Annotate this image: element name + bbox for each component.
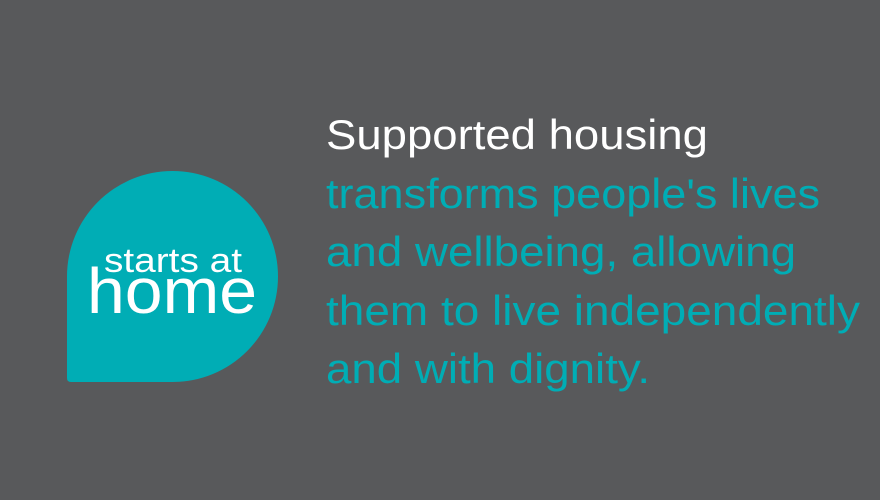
statement text block [326, 111, 860, 392]
statement heading line: Supported housing [326, 111, 708, 158]
logo speech-drop shape [67, 171, 278, 382]
statement teal lines: transforms people's lives [326, 170, 820, 217]
statement teal lines [326, 170, 860, 392]
logo text: starts at: starts at [104, 242, 243, 280]
statement teal lines: and wellbeing, allowing [326, 228, 796, 275]
logo text: home: home [87, 255, 257, 327]
statement teal lines: and with dignity. [326, 345, 650, 392]
statement teal lines: them to live independently [326, 287, 860, 334]
logo: starts at home [67, 171, 278, 382]
